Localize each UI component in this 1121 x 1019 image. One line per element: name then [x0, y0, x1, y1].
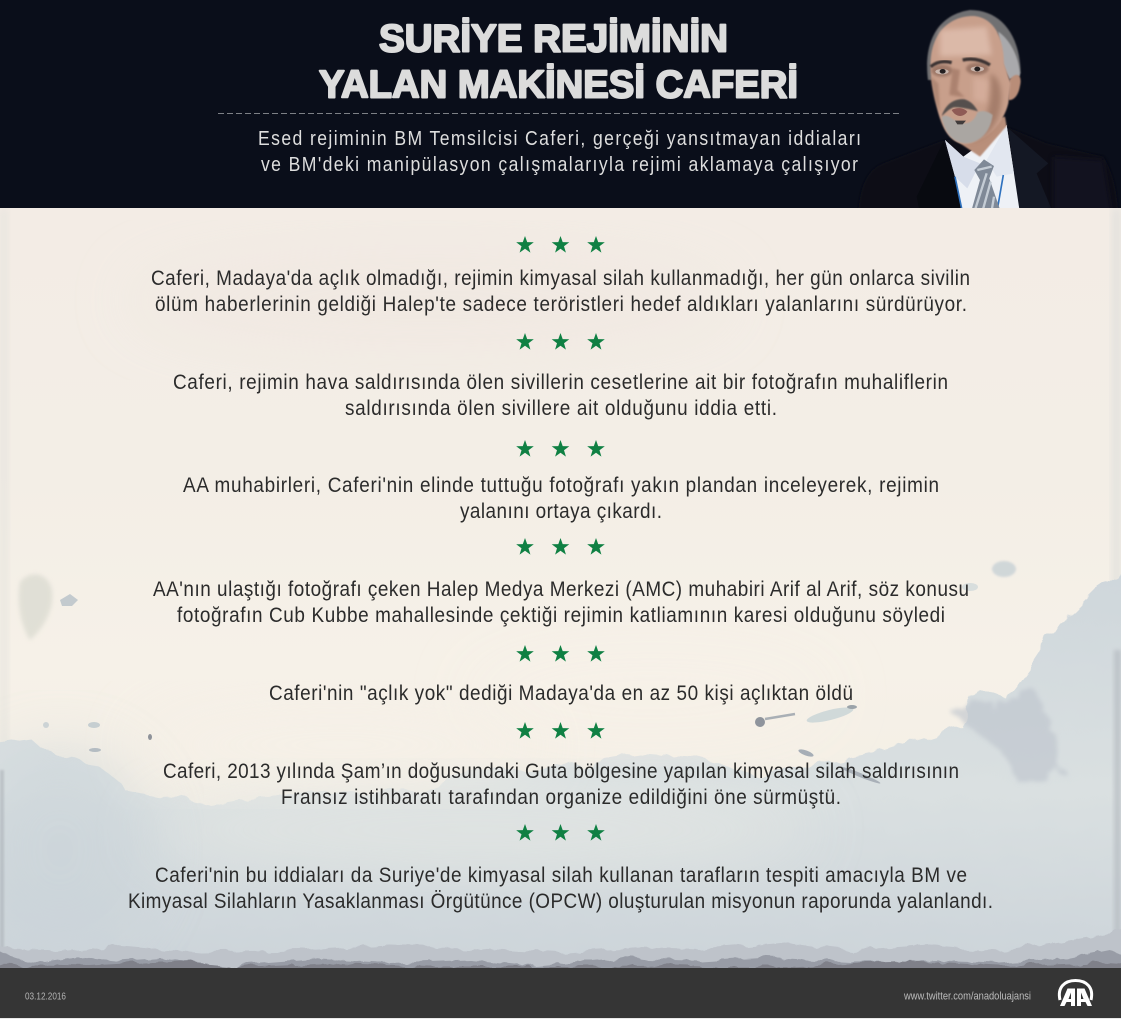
- text block 2: [173, 371, 948, 420]
- text block 5: Caferi'nin "açlık yok" dediği Madaya'da en az 50 kişi açlıktan öldü: [269, 682, 853, 705]
- subtitle: Esed rejiminin BM Temsilcisi Caferi, gerçeği yansıtmayan iddiaları: [258, 127, 861, 149]
- header band: [0, 0, 1121, 213]
- text block 6: Fransız istihbaratı tarafından organize edildiğini öne sürmüştü.: [281, 786, 841, 809]
- star divider 2: [516, 333, 605, 350]
- eye sockets: [931, 65, 953, 77]
- mouth: [952, 108, 967, 116]
- text block 7: Kimyasal Silahların Yasaklanması Örgütünce (OPCW) oluşturulan misyonun raporunda yalanlandı.: [128, 890, 993, 913]
- date: 03.12.2016: [25, 990, 66, 1002]
- star divider 6: [516, 722, 605, 739]
- text block 3: yalanını ortaya çıkardı.: [460, 500, 662, 523]
- text block 2: saldırısında ölen sivillere ait olduğunu iddia etti.: [345, 397, 777, 420]
- portrait of Caferi: [916, 9, 1109, 208]
- text block 3: AA muhabirleri, Caferi'nin elinde tuttuğu fotoğrafı yakın plandan inceleyerek, rejimin: [183, 474, 939, 497]
- text block 7: [128, 864, 993, 913]
- tie: [972, 160, 1000, 208]
- nose: [949, 68, 965, 97]
- lanyard: [955, 175, 1003, 213]
- star divider 5: [516, 645, 605, 662]
- face: [931, 16, 1011, 144]
- text block 4: [153, 578, 969, 627]
- shirt: [945, 125, 1020, 213]
- beard: [942, 111, 993, 143]
- neck: [953, 117, 1007, 157]
- grey-blue water stain: [0, 560, 1121, 980]
- twitter address: www.twitter.com/anadoluajansi: [903, 990, 1031, 1002]
- paper background: [0, 208, 1121, 980]
- star divider 4: [516, 538, 605, 555]
- text block 6: Caferi, 2013 yılında Şam’ın doğusundaki Guta bölgesine yapılan kimyasal silah saldırısının: [163, 760, 959, 783]
- title: SURİYE REJİMİNİN: [379, 18, 728, 60]
- text block 2: Caferi, rejimin hava saldırısında ölen sivillerin cesetlerine ait bir fotoğrafın muhaliflerin: [173, 371, 948, 394]
- suit jacket: [858, 128, 1118, 213]
- text block 6: [163, 760, 959, 809]
- star divider 3: [516, 440, 605, 457]
- text block 1: ölüm haberlerinin geldiği Halep'te sadece teröristleri hedef aldıkları yalanlarını sürdürüyor.: [155, 293, 967, 316]
- text block 4: fotoğrafın Cub Kubbe mahallesinde çektiği rejimin katliamının karesi olduğunu söyledi: [177, 604, 945, 627]
- moustache: [942, 99, 978, 116]
- title: [319, 18, 798, 106]
- bottom stain bands: [0, 930, 1121, 975]
- title: YALAN MAKİNESİ CAFERİ: [319, 64, 798, 106]
- eyebrows: [931, 62, 952, 67]
- star divider 7: [516, 824, 605, 841]
- hair: [927, 10, 1021, 80]
- text block 4: AA'nın ulaştığı fotoğrafı çeken Halep Medya Merkezi (AMC) muhabiri Arif al Arif, söz konusu: [153, 578, 969, 601]
- star divider 1: [516, 236, 605, 253]
- ear: [1008, 75, 1021, 100]
- text block 7: Caferi'nin bu iddiaları da Suriye'de kimyasal silah kullanan tarafların tespiti amacıyla BM ve: [155, 864, 967, 887]
- text block 1: Caferi, Madaya'da açlık olmadığı, rejimin kimyasal silah kullanmadığı, her gün onlarca sivilin: [151, 267, 970, 290]
- eyes: [935, 69, 949, 74]
- icon: Anadolu Agency logo: [1059, 980, 1092, 1006]
- text block 1: [151, 267, 970, 316]
- stain: scattered blots: [19, 561, 1016, 785]
- subtitle: [258, 127, 861, 175]
- subtitle: ve BM'deki manipülasyon çalışmalarıyla rejimi aklamaya çalışıyor: [261, 153, 858, 175]
- footer bar: [0, 968, 1121, 1019]
- text block 3: [183, 474, 939, 523]
